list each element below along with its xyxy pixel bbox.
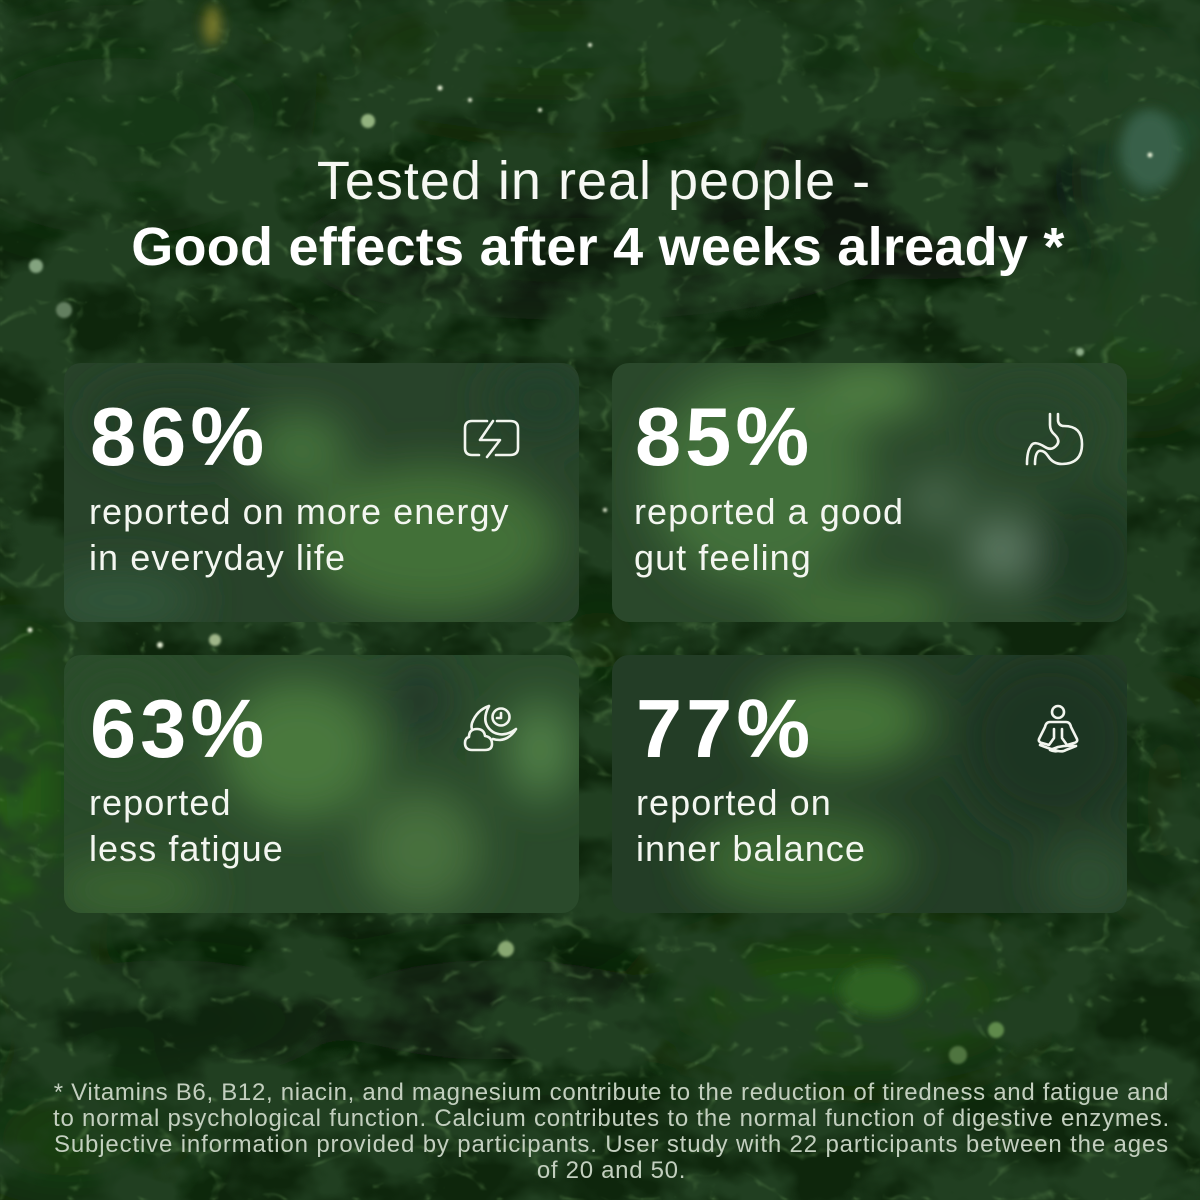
footnote: to normal psychological function. Calcium contributes to the normal function of digestive enzymes. [53,1105,1170,1132]
panel: 85% gut [634,390,1084,578]
footnote: * Vitamins B6, B12, niacin, and magnesium contribute to the reduction of tiredness and fatigue and [54,1079,1169,1106]
text: balance [636,782,866,869]
text: fatigue: less fatigue [89,828,284,869]
panel: 63% fatigue [89,682,518,869]
text: balance: inner balance [636,828,866,869]
text: energy: reported on more energy [89,491,510,532]
title [131,151,1065,277]
stat: 85%: 85% [635,390,813,483]
footnote: Subjective information provided by participants. User study with 22 participants between the ages [54,1131,1169,1158]
footnote [53,1079,1170,1184]
text: energy [89,491,510,578]
panel backdrop: blurred card 1 [64,363,579,622]
title: Good effects after 4 weeks already * [131,217,1065,277]
icon: moon, clock and cloud [464,704,518,752]
text: gut [634,491,904,578]
icon: meditating person [1038,704,1078,753]
panel: 77% balance [636,682,1078,869]
text: gut: reported a good [634,491,904,532]
stat: 77%: 77% [636,682,814,775]
panel: 86% energy [89,390,520,578]
stat: 86%: 86% [90,390,268,483]
text: energy: in everyday life [89,537,346,578]
text: balance: reported on [636,782,832,823]
title: Tested in real people - [317,151,871,211]
panel backdrop: blurred card 2 [612,360,1150,634]
text: fatigue [89,782,284,869]
icon: battery bolt [464,420,520,458]
icon: stomach [1026,412,1084,466]
footnote: of 20 and 50. [537,1157,686,1184]
panel backdrop: blurred card 3 [50,650,579,920]
panel backdrop: blurred card 4 [612,650,1140,920]
text: fatigue: reported [89,782,232,823]
stat: 63%: 63% [90,682,268,775]
text: gut: gut feeling [634,537,812,578]
